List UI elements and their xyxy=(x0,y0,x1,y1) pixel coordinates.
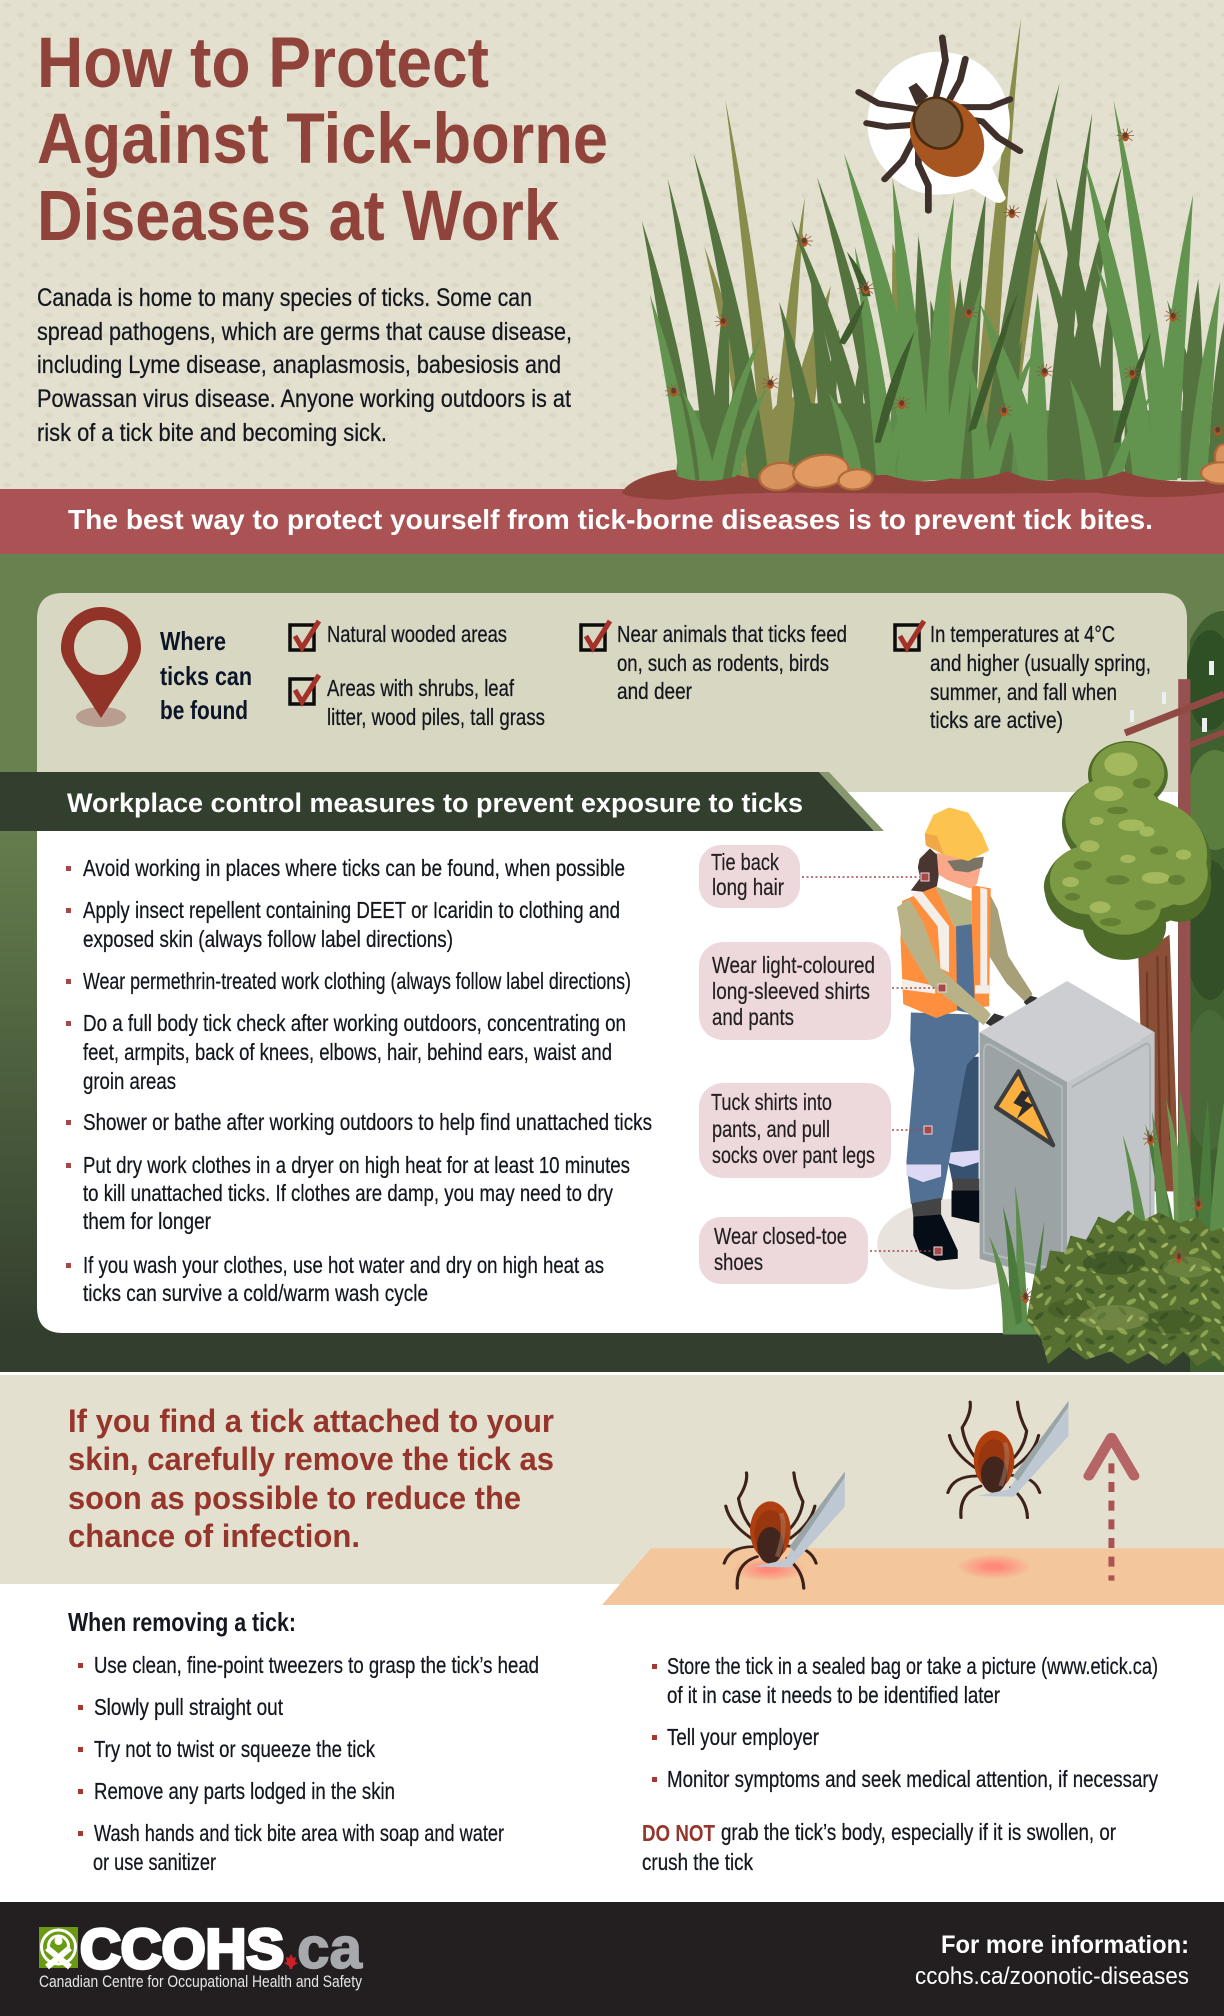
soil mound xyxy=(622,469,1224,500)
icon: tick lifted by tweezers xyxy=(948,1401,1068,1518)
panel: where ticks can be found xyxy=(37,593,1187,793)
dark grass blades xyxy=(642,83,1224,480)
checklist item: shrubs: litter, wood piles, tall grass xyxy=(327,704,545,730)
measures list: groin areas xyxy=(83,1068,176,1094)
green section background xyxy=(0,554,1224,1372)
warning: do not xyxy=(642,1819,1116,1875)
measures list: Wear permethrin-treated work clothing (always follow label directions) xyxy=(83,968,631,994)
icon: large tick xyxy=(859,37,1020,211)
title: Diseases at Work xyxy=(37,177,559,256)
tree xyxy=(1044,741,1211,1191)
title: How to Protect xyxy=(37,24,489,103)
checklist item: temperatures: In temperatures at 4°C xyxy=(930,621,1115,647)
callout: light-coloured clothing: long-sleeved shirts xyxy=(712,978,870,1004)
measures list: them for longer xyxy=(83,1208,211,1234)
checklist item: temperatures: and higher (usually spring, xyxy=(930,650,1151,676)
panel: workplace control measures xyxy=(0,772,1178,1333)
measures list: Shower or bathe after working outdoors to help find unattached ticks xyxy=(83,1109,652,1135)
small ticks near bush xyxy=(1018,1130,1206,1303)
measures list: Put dry work clothes in a dryer on high heat for at least 10 minutes xyxy=(83,1152,630,1178)
bite mark xyxy=(733,1557,806,1581)
bush xyxy=(1027,1210,1224,1368)
callout: tie back long hair xyxy=(699,845,929,908)
icon: electrical hazard sign xyxy=(996,1071,1053,1145)
checklist item: shrubs xyxy=(290,675,545,730)
callout: closed-toe shoes xyxy=(699,1217,942,1284)
title: Against Tick-borne xyxy=(37,100,608,179)
intro text block: spread pathogens, which are germs that cause disease, xyxy=(37,318,572,346)
grass clumps xyxy=(676,393,1185,481)
worker figure xyxy=(897,808,1038,1261)
intro text block: including Lyme disease, anaplasmosis, babesiosis and xyxy=(37,351,561,379)
right steps list xyxy=(652,1653,1158,1792)
measures list: to kill unattached ticks. If clothes are damp, you may need to dry xyxy=(83,1180,613,1206)
ground shadow xyxy=(877,1199,1038,1289)
warning: do not: crush the tick xyxy=(642,1849,753,1875)
measures list: exposed skin (always follow label directions) xyxy=(83,926,453,952)
measures list xyxy=(66,855,652,1306)
olive grass blades xyxy=(704,18,1048,480)
heading: where ticks can be found: be found xyxy=(160,695,248,725)
measures list: feet, armpits, back of knees, elbows, hair, behind ears, waist and xyxy=(83,1039,612,1065)
checklist item: temperatures: summer, and fall when xyxy=(930,679,1117,705)
heading: if you find a tick: soon as possible to reduce the xyxy=(68,1480,521,1516)
utility pole xyxy=(1178,679,1190,1205)
footer xyxy=(0,1902,1224,2016)
forest background at right xyxy=(1184,611,1224,1372)
callout: tuck shirts xyxy=(699,1083,932,1178)
warning: do not: grab the tick’s body, especially if it is swollen, or xyxy=(721,1819,1116,1845)
utility pole crossarms xyxy=(1125,661,1224,745)
intro text block: Canada is home to many species of ticks. Some can xyxy=(37,284,532,312)
heading: if you find a tick xyxy=(68,1403,554,1554)
header background xyxy=(0,0,1224,489)
illustration: tick removal steps xyxy=(602,1401,1224,1605)
heading: where ticks can be found xyxy=(160,626,252,725)
checklist item: temperatures xyxy=(895,621,1151,733)
callout: tuck shirts: socks over pant legs xyxy=(712,1142,875,1168)
intro text block xyxy=(37,284,572,447)
stones xyxy=(757,444,1224,493)
checklist item: animals: Near animals that ticks feed xyxy=(617,621,847,647)
checklist item: wooded areas xyxy=(290,621,507,650)
section heading band: Workplace control measures to prevent exposure to ticks xyxy=(67,788,803,818)
dark accent blades xyxy=(839,252,1151,443)
icon: location pin xyxy=(61,607,141,727)
callout: closed-toe shoes: shoes xyxy=(714,1249,763,1275)
bite mark after removal xyxy=(957,1554,1031,1579)
checklist item: wooded areas: Natural wooded areas xyxy=(327,621,507,647)
left steps list: Remove any parts lodged in the skin xyxy=(94,1778,395,1804)
left steps list: Wash hands and tick bite area with soap and water xyxy=(94,1820,504,1846)
small ticks on grass xyxy=(665,129,1224,436)
callout: light-coloured clothing: Wear light-coloured xyxy=(712,952,875,978)
logo: CCOHS xyxy=(39,1916,363,1991)
logo: CCOHS: Canadian Centre for Occupational Health and Safety xyxy=(39,1972,362,1991)
measures list: Apply insect repellent containing DEET or Icaridin to clothing and xyxy=(83,897,620,923)
arrow: pull straight up xyxy=(1089,1437,1134,1581)
right steps list: of it in case it needs to be identified later xyxy=(667,1682,1000,1708)
heading: if you find a tick: skin, carefully remove the tick as xyxy=(68,1441,554,1477)
intro text block: risk of a tick bite and becoming sick. xyxy=(37,419,387,447)
measures list: Avoid working in places where ticks can be found, when possible xyxy=(83,855,625,881)
skin surface xyxy=(602,1548,1224,1605)
icon: tick held by tweezers on skin xyxy=(724,1472,845,1588)
more information xyxy=(915,1931,1189,1990)
checklist item: temperatures: ticks are active) xyxy=(930,707,1063,733)
left steps list: Use clean, fine-point tweezers to grasp the tick’s head xyxy=(94,1652,539,1678)
red banner: The best way to protect yourself from tick-borne diseases is to prevent tick bites. xyxy=(68,504,1153,535)
grass illustration with ticks xyxy=(622,18,1224,500)
title xyxy=(37,24,608,256)
heading: when removing a tick: When removing a tick: xyxy=(68,1607,296,1637)
heading: if you find a tick: chance of infection. xyxy=(68,1518,360,1554)
callout: light-coloured clothing xyxy=(699,942,946,1040)
logo: CCOHS: ca xyxy=(297,1916,363,1981)
left steps list: Try not to twist or squeeze the tick xyxy=(94,1736,375,1762)
more information: For more information: xyxy=(941,1931,1189,1959)
red banner xyxy=(0,489,1224,554)
intro text block: Powassan virus disease. Anyone working outdoors is at xyxy=(37,385,571,413)
left steps list xyxy=(78,1652,539,1875)
warning: do not: DO NOT xyxy=(642,1820,715,1846)
speech bubble xyxy=(867,52,1010,203)
left steps list: or use sanitizer xyxy=(93,1849,216,1875)
grass at box xyxy=(989,1090,1224,1335)
checklist item: animals: on, such as rodents, birds xyxy=(617,650,829,676)
electrical box xyxy=(980,981,1155,1284)
callout: tie back long hair: long hair xyxy=(712,874,784,900)
measures list: If you wash your clothes, use hot water and dry on high heat as xyxy=(83,1252,604,1278)
logo: CCOHS: CCOHS xyxy=(80,1917,284,1980)
panel: tick removal header xyxy=(0,1372,1224,1584)
heading: where ticks can be found: ticks can xyxy=(160,661,252,691)
right steps list: Tell your employer xyxy=(667,1724,819,1750)
section heading band xyxy=(0,772,884,831)
callout: tuck shirts: pants, and pull xyxy=(712,1116,830,1142)
checklist item: animals xyxy=(581,621,847,704)
left steps list: Slowly pull straight out xyxy=(94,1694,283,1720)
heading: if you find a tick: If you find a tick attached to your xyxy=(68,1403,554,1439)
illustration: worker, electrical box, tree and bush xyxy=(877,679,1224,1368)
callout: light-coloured clothing: and pants xyxy=(712,1004,794,1030)
heading: where ticks can be found: Where xyxy=(160,626,226,656)
more information: ccohs.ca/zoonotic-diseases xyxy=(915,1963,1189,1990)
callout: tuck shirts: Tuck shirts into xyxy=(711,1089,832,1115)
checklist item: animals: and deer xyxy=(617,678,692,704)
callout: closed-toe shoes: Wear closed-toe xyxy=(714,1223,847,1249)
panel: when removing a tick xyxy=(68,1607,1158,1875)
measures list: Do a full body tick check after working outdoors, concentrating on xyxy=(83,1010,626,1036)
checklist item: shrubs: Areas with shrubs, leaf xyxy=(327,675,514,701)
green grass blades xyxy=(650,100,1220,480)
measures list: ticks can survive a cold/warm wash cycle xyxy=(83,1280,428,1306)
callout: tie back long hair: Tie back xyxy=(711,849,779,875)
